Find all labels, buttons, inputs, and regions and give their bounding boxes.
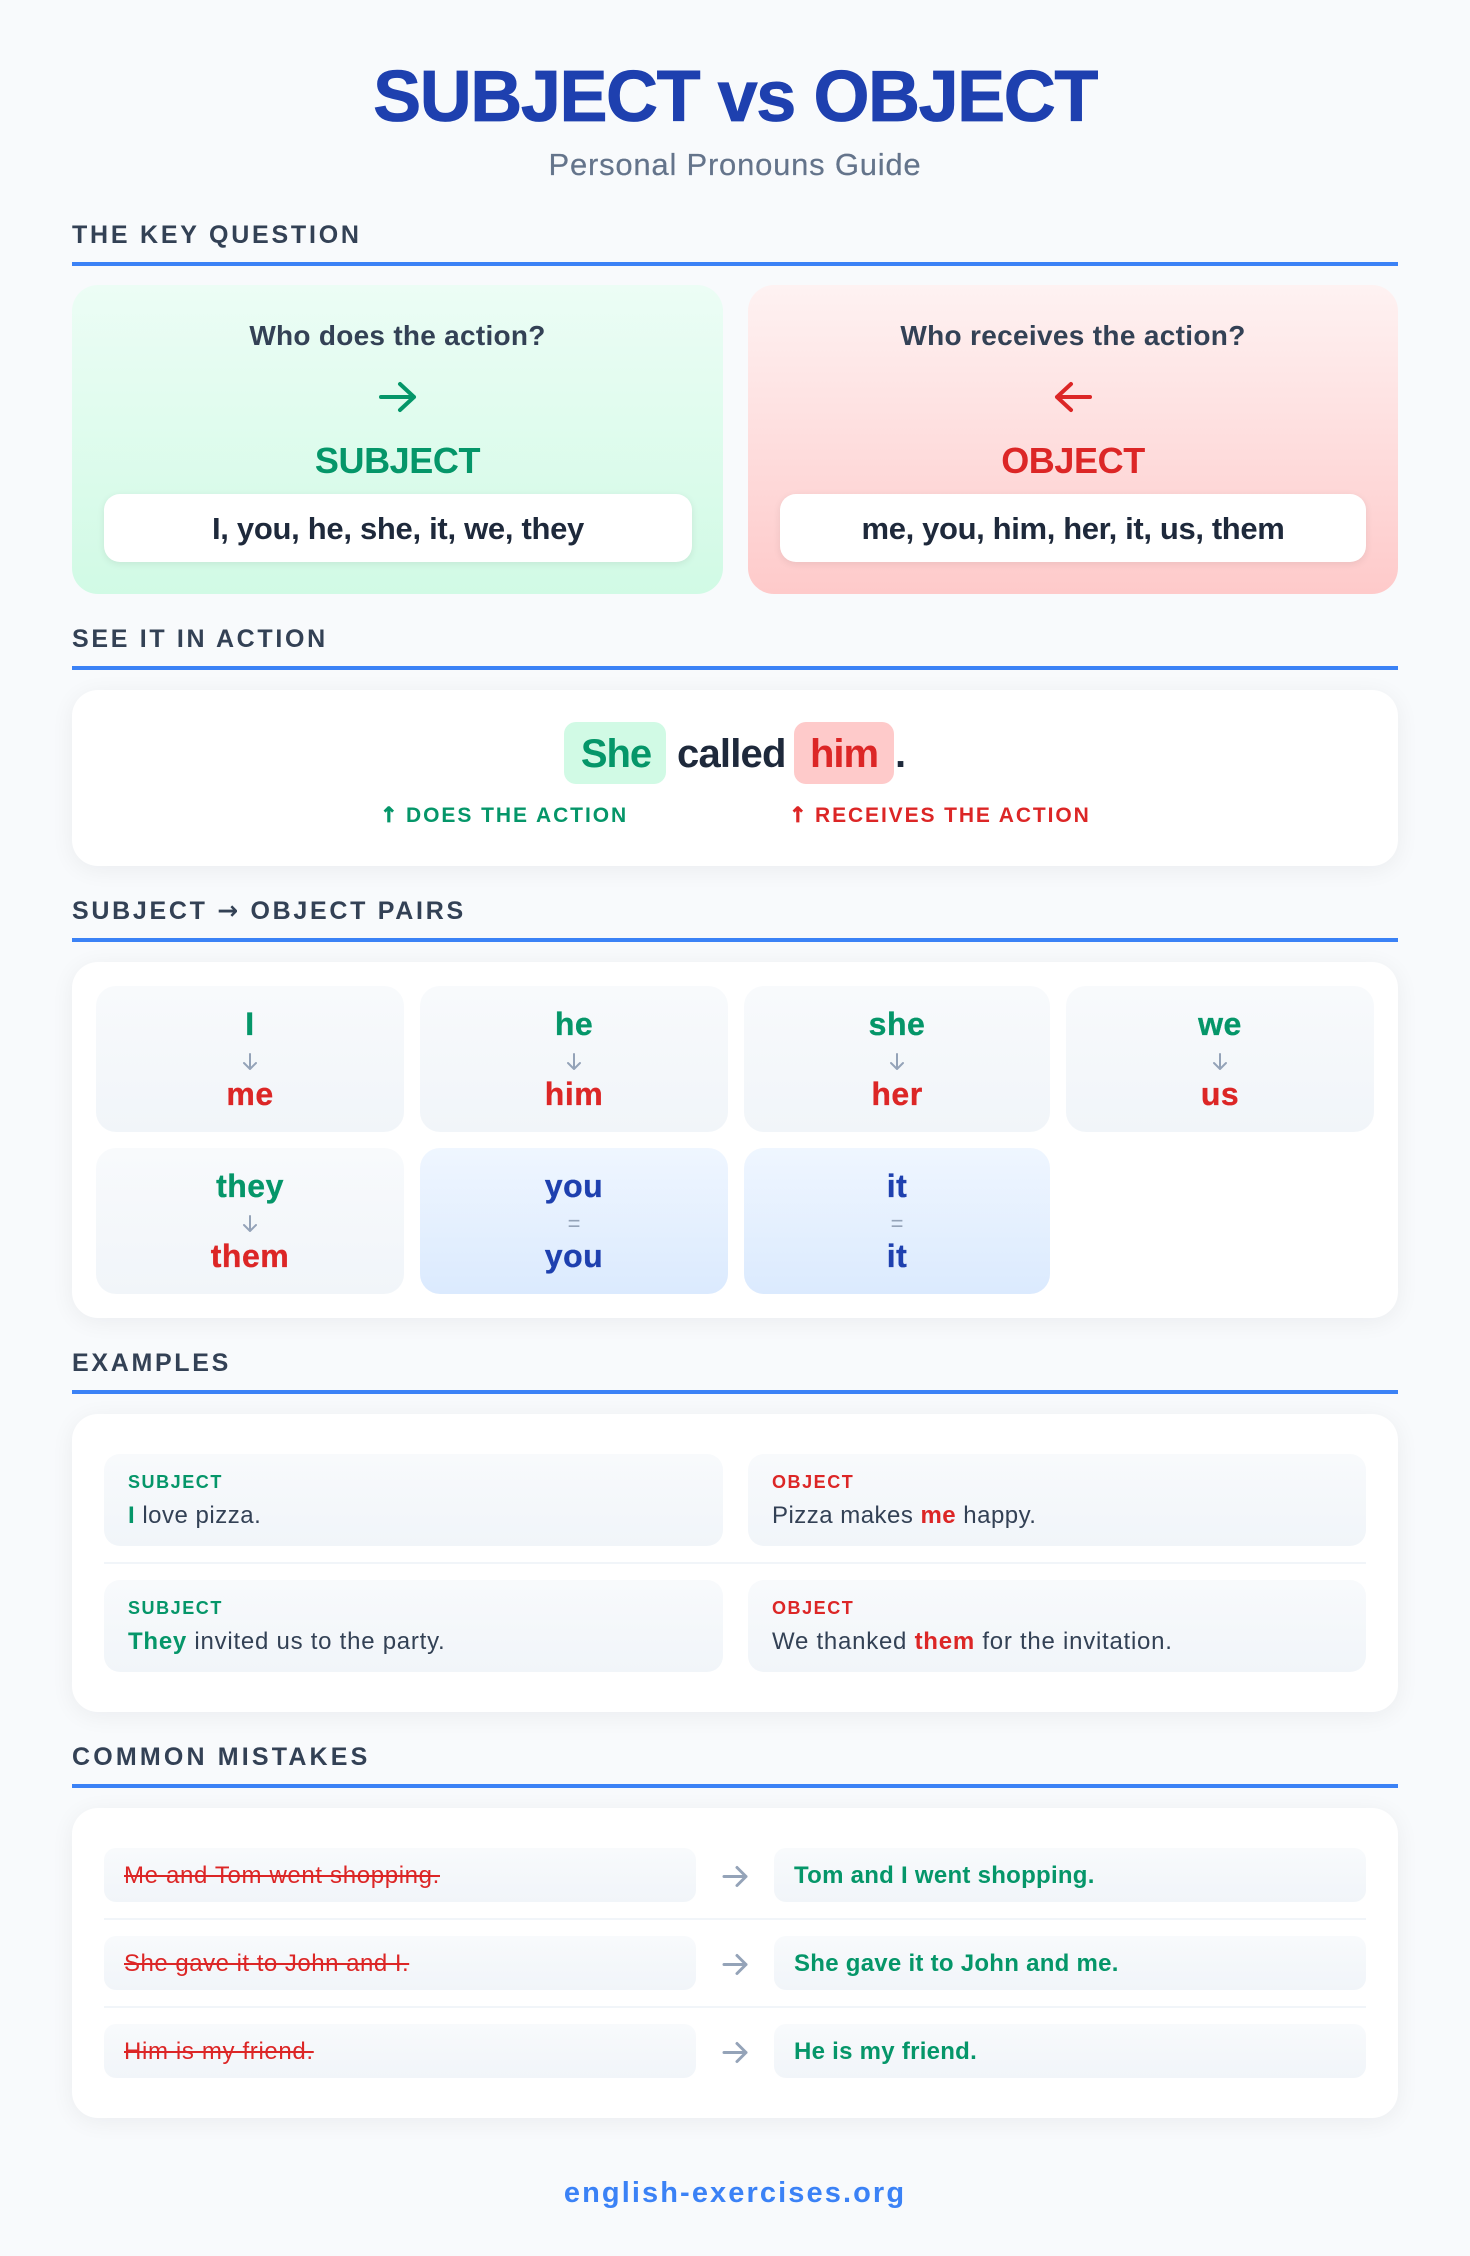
period: .: [895, 732, 906, 776]
subject label: SUBJECT: [315, 440, 480, 481]
pair: I me: I: [245, 1006, 255, 1042]
example: We thanked them: OBJECT: [772, 1598, 854, 1618]
subject highlight: She: [564, 722, 666, 784]
footer: english-exercises.org: [564, 2176, 906, 2208]
pair: we us: us: [1201, 1076, 1239, 1112]
example: We thanked them: [748, 1580, 1366, 1672]
subject highlight: She: She: [581, 732, 651, 776]
word: called: called: [677, 732, 786, 776]
pair: they them: them: [211, 1238, 289, 1274]
pair: it it: it: [887, 1238, 907, 1274]
mistake row 2: She gave it to John and me.: [794, 1950, 1119, 1977]
example: I love pizza: I love pizza.: [128, 1502, 261, 1529]
pair: we us: we: [1198, 1006, 1242, 1042]
subject question: Who does the action?: [249, 320, 546, 351]
mistake row 3: Him is my friend.: [124, 2038, 314, 2065]
panel: common mistakes: [72, 1808, 1398, 2118]
pair: I me: [96, 986, 404, 1132]
object pronouns list: [780, 494, 1366, 562]
panel: object card: [748, 285, 1398, 594]
heading: see it in action: SEE IT IN ACTION: [72, 625, 328, 653]
pair: he him: him: [545, 1076, 603, 1112]
object label: OBJECT: [1001, 440, 1145, 481]
example: They invited us: [104, 1580, 723, 1672]
mistake row 3: He is my friend.: [794, 2038, 977, 2065]
example: Pizza makes me happy: Pizza makes me happy.: [772, 1502, 1036, 1529]
object highlight: him: him: [810, 732, 878, 776]
panel: examples: [72, 1414, 1398, 1712]
caption: does the action: DOES THE ACTION: [406, 804, 628, 827]
mistake row 2: She gave it to John and I.: [124, 1950, 409, 1977]
subtitle: Personal Pronouns Guide: [549, 147, 921, 182]
pair: we us: [1066, 986, 1374, 1132]
mistake row 2: [104, 1945, 1366, 1990]
pair: he him: he: [555, 1006, 593, 1042]
pair: she her: [744, 986, 1050, 1132]
caption: does the action: ↑: [380, 803, 398, 827]
title: SUBJECT vs OBJECT: [373, 57, 1097, 137]
icon: left arrow: [1054, 382, 1092, 412]
caption: receives the action: ↑: [789, 803, 807, 827]
example: Pizza makes me happy: OBJECT: [772, 1472, 854, 1492]
subject pronouns list: [104, 494, 692, 562]
example: They invited us: They invited us to the party.: [128, 1628, 445, 1655]
object pronouns list: me, you, him, her, it, us, them: [862, 511, 1284, 546]
pair: it it: =: [891, 1211, 903, 1236]
icon: right arrow: [379, 382, 416, 412]
heading: common mistakes: COMMON MISTAKES: [72, 1743, 370, 1771]
pair: she her: she: [869, 1006, 925, 1042]
pair: it it: it: [887, 1168, 907, 1204]
pair: he him: [420, 986, 728, 1132]
example: They invited us: SUBJECT: [128, 1598, 223, 1618]
pair: you you: you: [545, 1238, 603, 1274]
example: I love pizza: [104, 1454, 723, 1546]
pair: you you: [420, 1148, 728, 1294]
object highlight: him: [794, 722, 894, 784]
pair: they them: [96, 1148, 404, 1294]
pair: you you: =: [568, 1211, 580, 1236]
heading: examples: EXAMPLES: [72, 1349, 231, 1377]
pair: I me: me: [226, 1076, 274, 1112]
mistake row 1: [104, 1856, 1366, 1902]
example: Pizza makes me happy: [748, 1454, 1366, 1546]
mistake row 3: [104, 2033, 1366, 2078]
mistake row 1: Me and Tom went shopping.: [124, 1862, 440, 1889]
object question: Who receives the action?: [900, 320, 1246, 351]
heading: the key question: THE KEY QUESTION: [72, 221, 362, 249]
example: We thanked them: We thanked them for the invitation.: [772, 1628, 1173, 1655]
subject pronouns list: I, you, he, she, it, we, they: [212, 511, 584, 546]
panel: subject card: [72, 285, 723, 594]
mistake row 1: Tom and I went shopping.: [794, 1862, 1095, 1889]
pair: you you: you: [545, 1168, 603, 1204]
pair: they them: they: [216, 1168, 284, 1204]
heading: subject to object pairs: SUBJECT → OBJECT PAIRS: [72, 896, 466, 925]
panel: example sentence: [72, 690, 1398, 866]
pair: it it: [744, 1148, 1050, 1294]
pair: she her: her: [871, 1076, 923, 1112]
caption: receives the action: RECEIVES THE ACTION: [815, 804, 1091, 827]
panel: pronoun pairs: [72, 962, 1398, 1318]
example: I love pizza: SUBJECT: [128, 1472, 223, 1492]
